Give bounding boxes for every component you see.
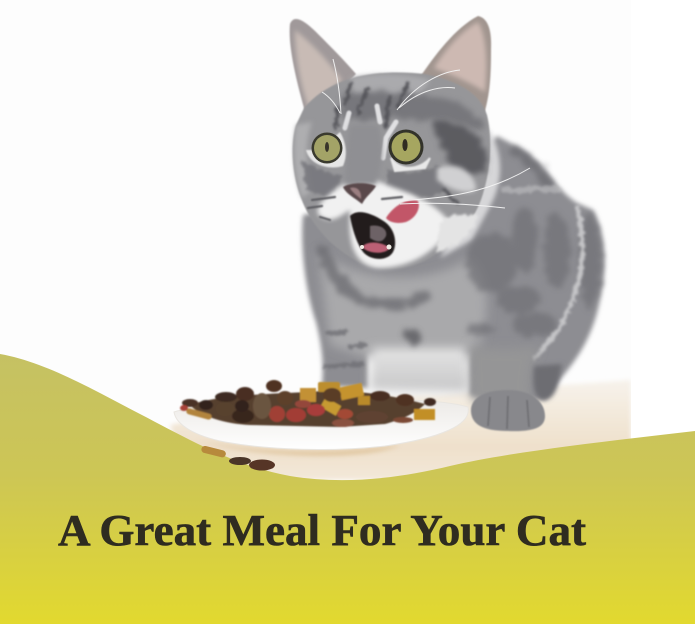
nose <box>343 183 376 204</box>
right cheek dark <box>432 122 487 173</box>
light flank band <box>505 189 582 358</box>
lower right cheek gray <box>385 165 445 200</box>
left leg stripes <box>326 332 366 366</box>
right cheek light <box>437 166 476 192</box>
cat body <box>302 128 605 402</box>
cat paw <box>471 390 545 431</box>
left cheek gray <box>302 160 342 198</box>
forehead stripes <box>336 82 458 204</box>
icon: right eye <box>388 130 430 171</box>
front leg <box>470 345 540 402</box>
mottled flank <box>466 208 601 337</box>
neck white ruff <box>440 128 500 258</box>
nose bridge <box>345 125 382 185</box>
chest fur <box>318 250 487 358</box>
dark shoulder stripes <box>322 150 548 340</box>
title: A Great Meal For Your Cat <box>58 506 586 555</box>
cat head <box>290 16 530 269</box>
left ear <box>290 19 356 122</box>
photo: cat <box>290 16 605 431</box>
light forehead marks <box>345 106 396 158</box>
whiskers <box>322 59 530 208</box>
right ear <box>418 16 491 114</box>
right white tuft <box>436 214 478 252</box>
spilled kibble <box>201 445 275 470</box>
icon: left eye <box>306 132 346 167</box>
left head light rim <box>294 122 312 198</box>
plate <box>174 399 468 449</box>
rear haunch shadow <box>533 364 562 400</box>
white chest <box>370 348 468 392</box>
dark forehead fur <box>340 92 484 130</box>
kibble pile <box>180 380 436 427</box>
skull <box>293 73 490 269</box>
photo: food plate <box>174 380 468 456</box>
plate shadow <box>195 439 400 456</box>
yellow wave <box>0 354 695 624</box>
table surface <box>170 380 631 480</box>
light head top <box>350 74 430 95</box>
tongue <box>386 200 419 223</box>
mouth <box>350 212 395 259</box>
whisker-pad stripes <box>308 197 402 220</box>
muzzle and chin white <box>318 178 452 268</box>
